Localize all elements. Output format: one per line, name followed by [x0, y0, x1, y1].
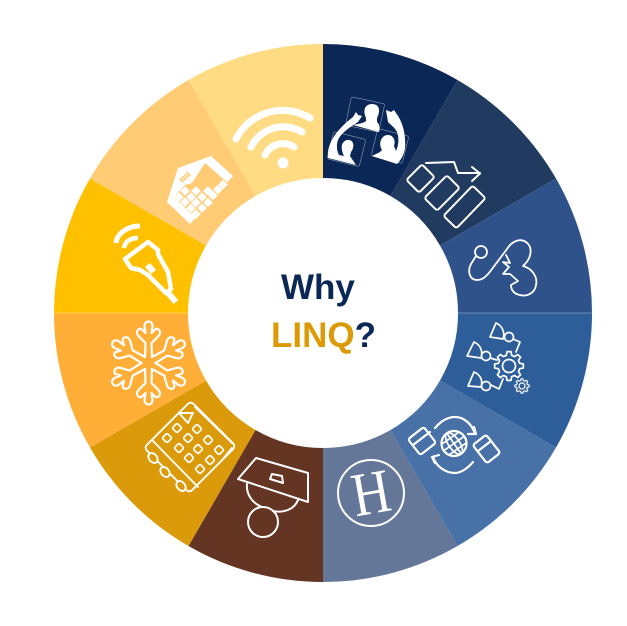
- segment 3: royal blue: [440, 178, 592, 313]
- icon: bar chart with trend arrow: [406, 162, 486, 228]
- icon: ultrasound probe: [116, 226, 176, 302]
- segment 10: amber: [54, 178, 206, 313]
- icon: snowflake: [107, 322, 190, 404]
- icon: ring-bound calendar: [144, 401, 236, 493]
- segment 9: orange: [54, 313, 206, 448]
- icon: video call participants: [327, 97, 409, 167]
- icon: globe between exchanging windows: [408, 417, 500, 473]
- title: Why LINQ?: Why: [281, 268, 355, 307]
- icon: people and gears: [467, 323, 529, 393]
- segment 1: navy: [323, 44, 458, 196]
- segment 6: grey blue: [323, 430, 458, 582]
- icon: graduate cap: [238, 458, 308, 537]
- segment 5: light blue: [390, 380, 556, 546]
- segment 2: slate navy: [390, 80, 556, 246]
- segment 7: brown: [188, 430, 323, 582]
- segment 12: pale yellow: [188, 44, 323, 196]
- icon: lungs and stethoscope line: [469, 240, 536, 296]
- icon: circled H logo: H: [346, 457, 396, 530]
- segment 11: peach: [90, 80, 256, 246]
- panel: twelve segment ring: [54, 44, 592, 582]
- title: Why LINQ?: LINQ?: [271, 316, 376, 355]
- segment 4: mid blue: [440, 313, 592, 448]
- title: Why LINQ?: [271, 268, 376, 355]
- segment 8: dark gold: [90, 380, 256, 546]
- icon: keypad device: [167, 156, 233, 224]
- icon: wifi signal: [236, 110, 310, 168]
